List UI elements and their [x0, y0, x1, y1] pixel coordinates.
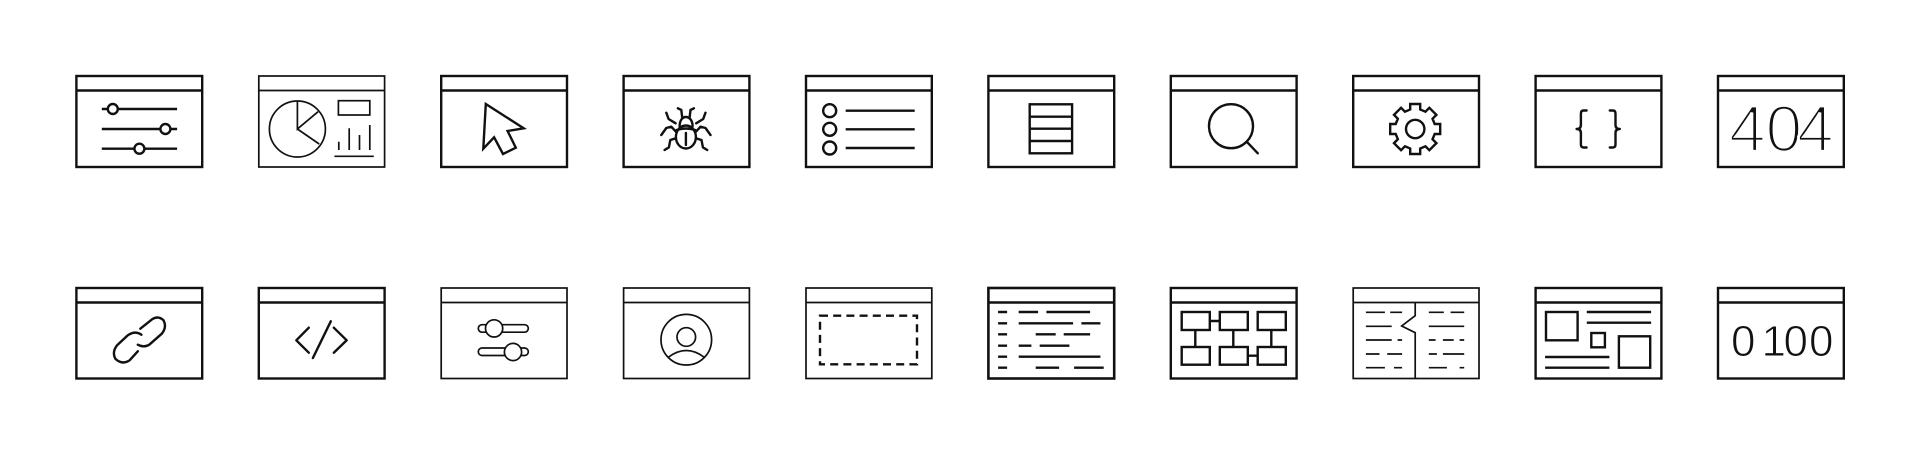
icon: dashboard window with pie and bars [259, 76, 385, 167]
toggle sliders [478, 320, 528, 361]
icon: window with lines of text [988, 288, 1114, 378]
icon: window with magnifier [1171, 76, 1297, 167]
window frame [988, 288, 1114, 378]
window frame [259, 76, 385, 167]
magnifying glass [1209, 104, 1258, 153]
bug [661, 108, 710, 150]
window frame [441, 288, 567, 378]
window frame [259, 288, 385, 378]
icon: window with cursor arrow [441, 76, 567, 167]
0100 digits: 0100 [1731, 317, 1833, 366]
cursor arrow [483, 104, 524, 154]
window frame [76, 76, 202, 167]
slider controls [102, 104, 177, 154]
icon: window with stacked rows [988, 76, 1114, 167]
stacked table [1030, 104, 1072, 153]
window frame [624, 76, 749, 167]
window frame [624, 288, 749, 378]
icon: window with gear [1353, 76, 1479, 167]
icon: window with bullet list [806, 76, 932, 167]
window frame [1353, 288, 1479, 378]
icon: window split by a torn divider [1353, 288, 1479, 378]
code tag symbol [296, 321, 347, 358]
icon: window with user avatar [624, 288, 749, 378]
404 digits: 404 [1729, 92, 1834, 166]
bullet list [823, 104, 915, 154]
icon: window with flow diagram [1171, 288, 1297, 378]
window frame [1536, 76, 1661, 167]
icon: window with 404 [1718, 76, 1844, 167]
window frame [76, 288, 202, 378]
icon: window with curly braces [1536, 76, 1661, 167]
window frame [988, 76, 1114, 167]
curly braces [1577, 110, 1620, 148]
flow diagram [1182, 312, 1286, 365]
window frame [1171, 76, 1297, 167]
user avatar [661, 314, 712, 365]
legend box [338, 101, 370, 115]
gear [1390, 104, 1440, 154]
window frame [806, 76, 932, 167]
bar chart [334, 125, 374, 156]
window frame [806, 288, 932, 378]
window frame [441, 76, 567, 167]
icon: window with bug [624, 76, 749, 167]
icon: window with page layout [1536, 288, 1661, 378]
icon: window with binary digits [1718, 288, 1844, 378]
icon: window with chain link [76, 288, 202, 378]
code lines [998, 312, 1104, 368]
icon: window with three sliders [76, 76, 202, 167]
window frame [1353, 76, 1479, 167]
split text lines [1366, 312, 1464, 368]
window frame [1536, 288, 1661, 378]
icon: window with two toggle sliders [441, 288, 567, 378]
window frame [1171, 288, 1297, 378]
icon: window with code tag [259, 288, 385, 378]
window frame [1718, 288, 1844, 378]
chain link [114, 318, 165, 362]
layout blocks [1545, 312, 1651, 368]
torn divider [1402, 302, 1415, 378]
pie chart [269, 101, 325, 157]
dashed selection box [820, 316, 917, 364]
window frame [1718, 76, 1844, 167]
icon: window with dashed selection [806, 288, 932, 378]
